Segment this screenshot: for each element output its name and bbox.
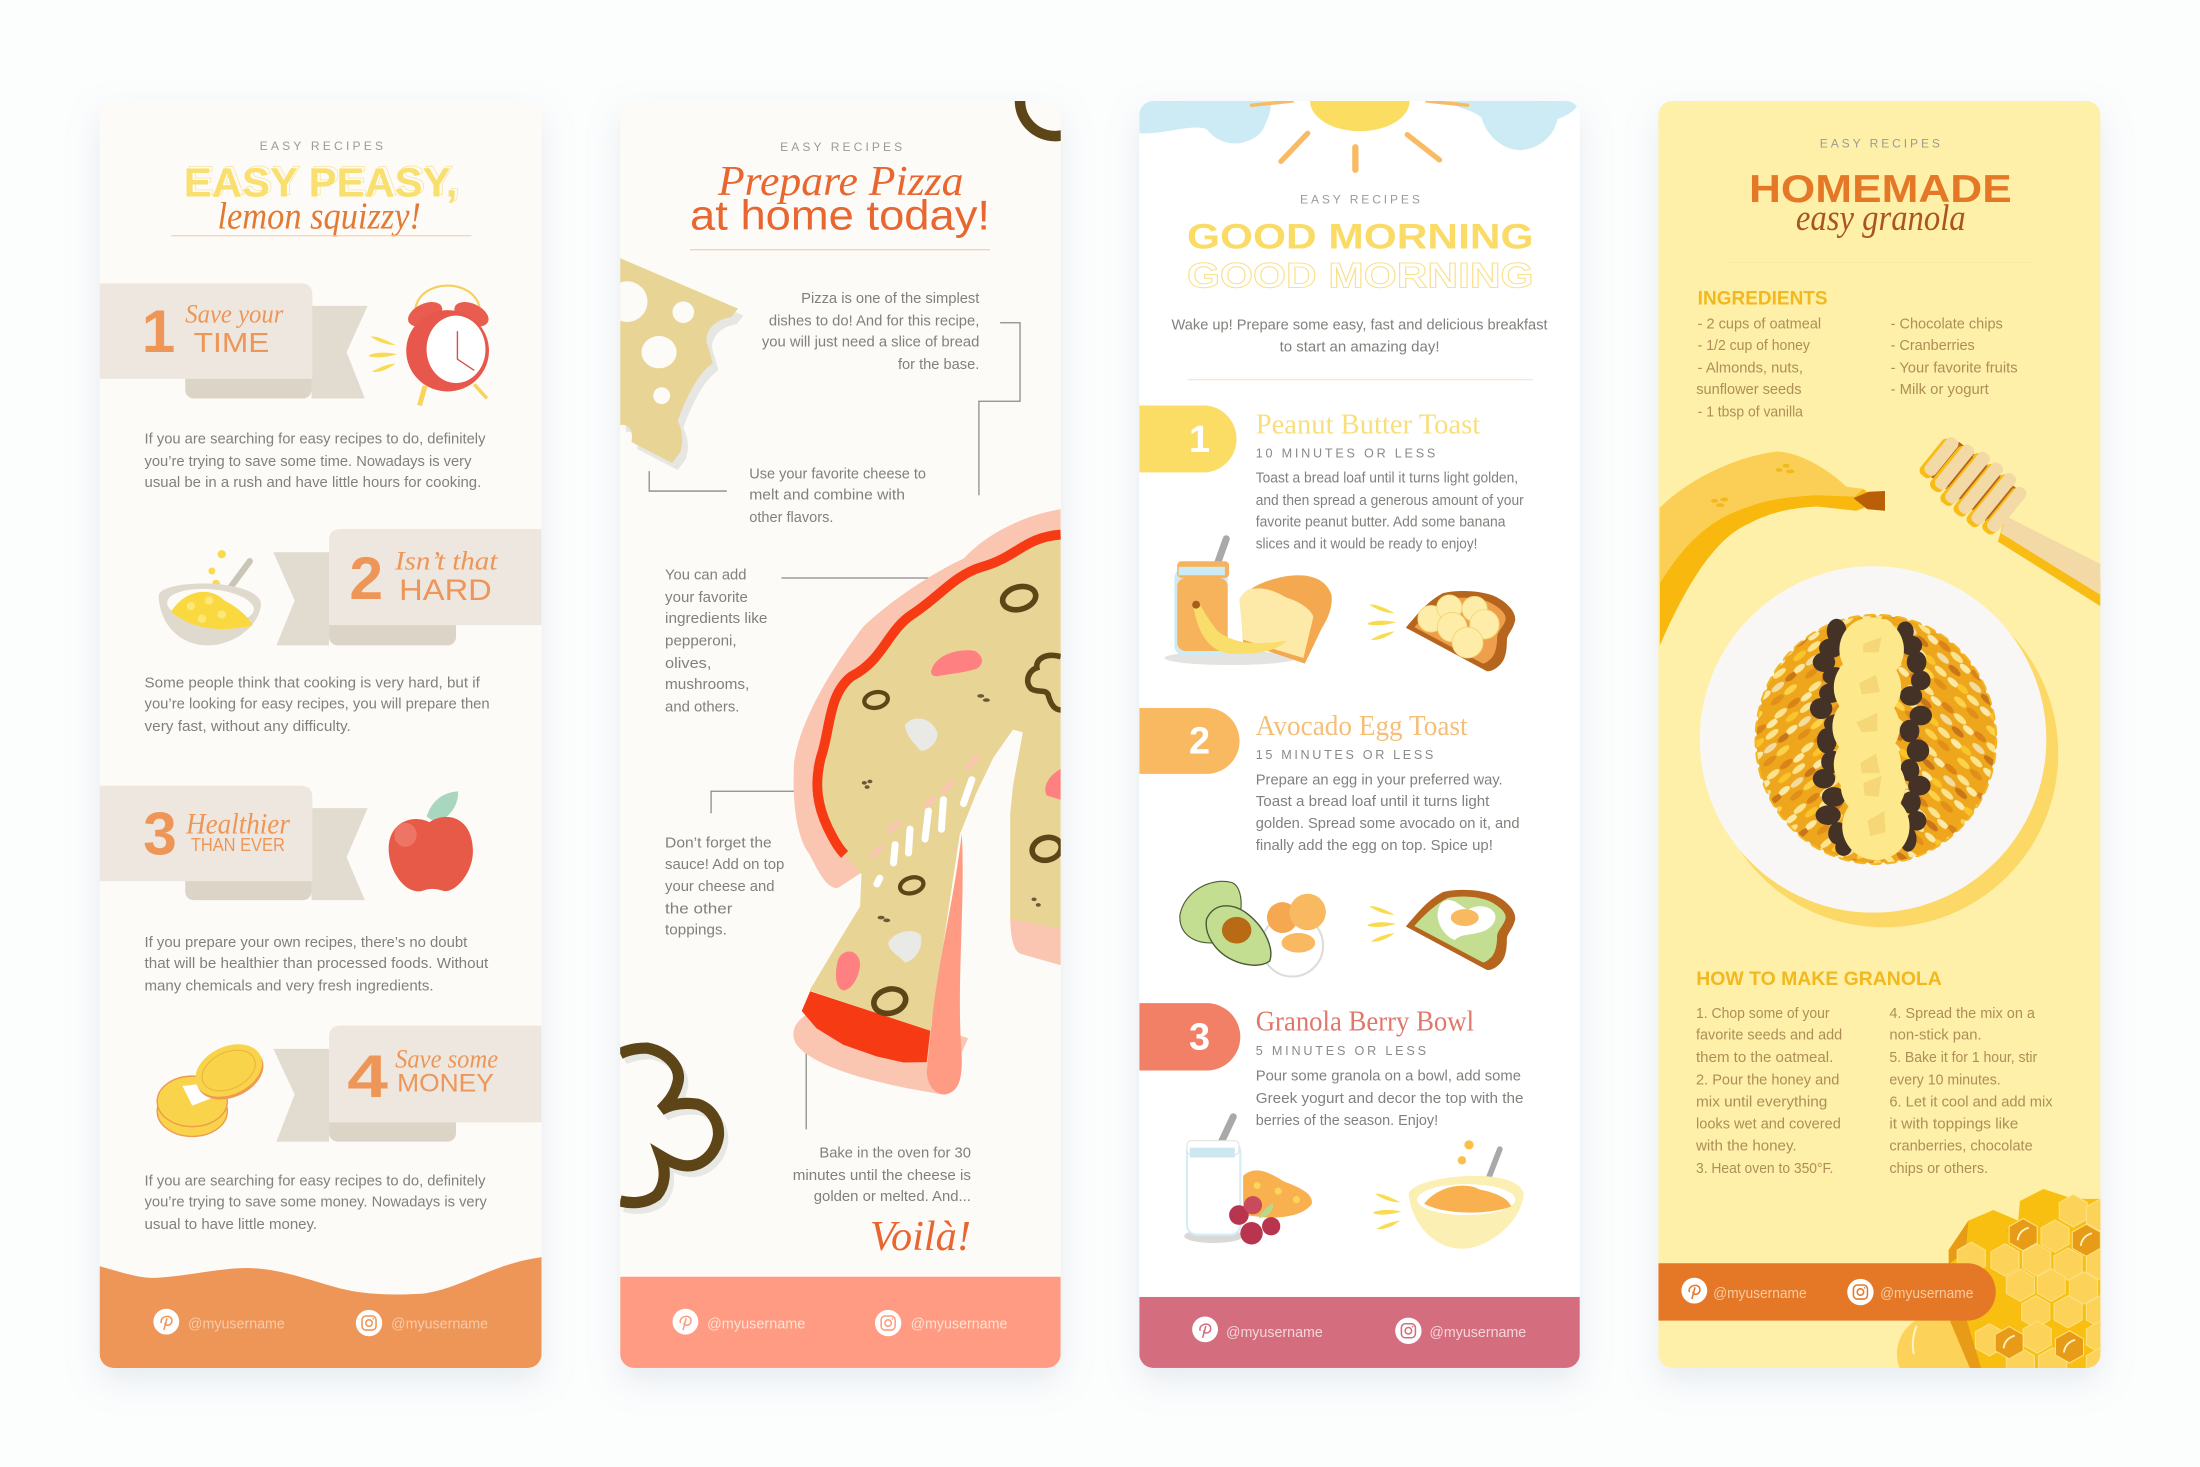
title: good morning: GOOD MORNING [1187, 257, 1534, 296]
step 1 text: peanut butter toast: Peanut Butter Toast [1256, 410, 1480, 441]
step 1 text: peanut butter toast: slices and it would be ready to enjoy! [1256, 537, 1477, 553]
text: save time [145, 431, 486, 491]
illustration: yogurt jar, granola, berries [1184, 1117, 1312, 1244]
step 3 tab [1139, 1003, 1240, 1071]
banner 2: isn't that hard: HARD [399, 574, 492, 607]
banner 1: save your time: TIME [194, 327, 269, 358]
step 1 tab [1139, 405, 1237, 472]
title: easy peasy: EASY PEASY, [184, 159, 457, 205]
footer: social handles [620, 1277, 1061, 1368]
callout: toppings: ingredients like [665, 611, 768, 627]
callout: sauce: Don’t forget the [665, 835, 772, 851]
steps column right: 5. Bake it for 1 hour, stir [1889, 1050, 2037, 1066]
step 1 text: peanut butter toast: Toast a bread loaf until it turns light golden, [1256, 471, 1518, 487]
ingredients list left [1696, 316, 1821, 421]
steps column right: it with toppings like [1889, 1117, 2018, 1133]
footer wave: social handles [100, 1257, 542, 1368]
step 2 text: avocado egg toast: Avocado Egg Toast [1256, 711, 1468, 742]
footer: social handles [1139, 1297, 1580, 1368]
step 2 tab [1139, 708, 1240, 774]
step 2 text: avocado egg toast: 15 MINUTES OR LESS [1256, 748, 1433, 762]
panel: pizza card [620, 101, 1061, 1368]
callout: toppings: olives, [665, 656, 711, 672]
callout: sauce: your cheese and [665, 879, 775, 895]
callout: bake [793, 1145, 971, 1205]
ingredients list left: - 2 cups of oatmeal [1698, 316, 1821, 332]
step 3 text: granola berry bowl: Pour some granola on a bowl, add some [1256, 1068, 1521, 1084]
banner 1: save your time: Save your [185, 299, 284, 329]
illustration: sun and clouds [1139, 101, 1580, 170]
ingredients list left: - 1/2 cup of honey [1698, 338, 1811, 354]
banner 1: save your time [100, 283, 368, 398]
steps column right [1889, 1006, 2053, 1177]
illustration: swiss cheese [607, 258, 744, 470]
step 2 text: avocado egg toast: finally add the egg on top. Spice up! [1256, 838, 1493, 854]
callout: sauce: the other [665, 901, 733, 917]
ingredients list right: - Chocolate chips [1891, 316, 2003, 332]
steps column right: every 10 minutes. [1889, 1073, 2001, 1089]
text: healthier [145, 935, 488, 995]
callout: cheese: Use your favorite cheese to [749, 466, 926, 482]
step 3 text: granola berry bowl: Granola Berry Bowl [1256, 1007, 1474, 1038]
icon: alarm clock [369, 286, 492, 405]
title: good morning [1187, 217, 1534, 296]
banner 3: healthier than ever: 3 [143, 799, 177, 867]
banner 4: save some money: MONEY [397, 1070, 494, 1098]
intro text: Wake up! Prepare some easy, fast and delicious breakfast [1172, 318, 1548, 334]
callout: toppings: pepperoni, [665, 633, 737, 649]
illustration: peanut butter jar, banana and bread [1165, 539, 1332, 665]
steps column left: 2. Pour the honey and [1696, 1073, 1839, 1089]
callout: bread base: for the base. [898, 357, 979, 373]
callout: toppings: your favorite [665, 590, 748, 606]
callout: bread base: Pizza is one of the simplest [801, 291, 979, 307]
banner 4: save some money: Save some [395, 1044, 498, 1074]
banner 2: isn't that hard: Isn’t that [394, 546, 498, 576]
step 2 tab: 2 [1189, 720, 1210, 762]
ingredients list right: - Milk or yogurt [1891, 382, 1989, 398]
steps column right: chips or others. [1889, 1161, 1988, 1177]
steps column right: 6. Let it cool and add mix [1889, 1095, 2053, 1111]
step 2 text: avocado egg toast: Prepare an egg in your preferred way. [1256, 772, 1503, 788]
footer: social handles: @myusername [1429, 1325, 1526, 1341]
text: save money: usual to have little money. [145, 1217, 317, 1233]
steps column left [1695, 1006, 1842, 1177]
ingredients list right [1891, 316, 2018, 398]
ingredients list right: - Cranberries [1891, 338, 1975, 354]
eyebrow: easy recipes: EASY RECIPES [1300, 192, 1420, 206]
icon: red apple [389, 791, 473, 891]
ingredients list right: - Your favorite fruits [1891, 361, 2018, 377]
callout: bake: minutes until the cheese is [793, 1168, 971, 1184]
panel: easy peasy card [100, 139, 542, 1368]
title: easy peasy: EASY PEASY, [187, 157, 460, 203]
footer: social handles: @myusername [707, 1317, 805, 1333]
callout: bread base: dishes to do! And for this recipe, [769, 314, 979, 330]
callout: sauce [665, 835, 784, 938]
footer: social handles: @myusername [1226, 1325, 1323, 1341]
text: save time: usual be in a rush and have little hours for cooking. [145, 475, 481, 491]
callout: cheese [749, 466, 926, 526]
callout: toppings: and others. [665, 699, 739, 715]
illustration: avocado and eggs [1180, 881, 1326, 977]
callout: toppings: mushrooms, [665, 677, 749, 693]
text: not hard: very fast, without any difficulty. [145, 719, 351, 735]
steps column left: them to the oatmeal. [1696, 1050, 1833, 1066]
ingredients list left: - 1 tbsp of vanilla [1698, 405, 1803, 421]
banner 3: healthier than ever: Healthier [185, 808, 290, 840]
illustration: granola plate [1700, 566, 2058, 927]
step 3 text: granola berry bowl: 5 MINUTES OR LESS [1256, 1044, 1426, 1058]
step 3 text: granola berry bowl: Greek yogurt and decor the top with the [1256, 1091, 1523, 1107]
ingredients list left: - Almonds, nuts, [1698, 361, 1803, 377]
panel: good morning card [1139, 101, 1580, 1368]
text: healthier: that will be healthier than processed foods. Without [145, 956, 488, 972]
step 3 text: granola berry bowl [1256, 1007, 1523, 1129]
banner 4: save some money [273, 1026, 542, 1142]
banner 4: save some money: 4 [347, 1042, 389, 1110]
callout: sauce: toppings. [665, 922, 727, 938]
text: not hard [145, 675, 490, 735]
steps column right: cranberries, chocolate [1889, 1138, 2033, 1154]
eyebrow: easy recipes: EASY RECIPES [1820, 136, 1940, 150]
title: prepare pizza [690, 158, 990, 238]
text: not hard: Some people think that cooking is very hard, but if [145, 675, 480, 691]
icon: mushroom outline top right [1014, 101, 1061, 142]
banner 1: save your time: 1 [142, 297, 175, 365]
banner 2: isn't that hard: 2 [349, 544, 383, 612]
step 1 text: peanut butter toast [1256, 410, 1524, 553]
callout: bake: golden or melted. And... [814, 1189, 971, 1205]
title script: easy granola: easy granola [1796, 198, 1966, 238]
illustration: honey dipper [1912, 427, 2100, 606]
heading: how to make granola: HOW TO MAKE GRANOLA [1696, 969, 1942, 990]
footer wave: social handles: @myusername [188, 1317, 285, 1333]
step 1 text: peanut butter toast: and then spread a generous amount of your [1256, 493, 1524, 509]
title: prepare pizza: at home today! [690, 191, 990, 238]
steps column left: 1. Chop some of your [1696, 1006, 1830, 1022]
title script: lemon squizzy: lemon squizzy! [217, 196, 421, 238]
step 1 tab: 1 [1189, 419, 1210, 461]
eyebrow: easy recipes: EASY RECIPES [260, 139, 383, 153]
callout: bread base [762, 291, 979, 373]
title: good morning: GOOD MORNING [1187, 217, 1534, 256]
title: prepare pizza: Prepare Pizza [717, 158, 963, 205]
panel: homemade granola card [1658, 136, 2114, 1393]
illustration: banana [1660, 452, 1885, 645]
icon: cereal bowl [159, 550, 261, 645]
text: save money: If you are searching for easy recipes to do, definitely [145, 1174, 486, 1190]
steps column left: with the honey. [1695, 1138, 1797, 1154]
icon: mushroom outline bottom left [620, 1048, 723, 1208]
steps column right: 4. Spread the mix on a [1889, 1006, 2035, 1022]
text: not hard: you’re looking for easy recipes, you will prepare then [145, 697, 490, 713]
illustration: pizza with pulled slice [793, 509, 1064, 1095]
text: save time: If you are searching for easy recipes to do, definitely [145, 431, 486, 447]
step 3 tab: 3 [1189, 1016, 1210, 1058]
ingredients list left: sunflower seeds [1696, 382, 1802, 398]
step 1 text: peanut butter toast: favorite peanut butter. Add some banana [1256, 515, 1506, 531]
text: save money: you’re trying to save some money. Nowadays is very [145, 1195, 488, 1211]
callout: bake: Bake in the oven for 30 [819, 1145, 971, 1161]
ingredients heading: INGREDIENTS [1698, 288, 1828, 309]
illustration: banana toast [1368, 591, 1515, 671]
illustration: honeycomb [1897, 1189, 2114, 1393]
callout: cheese: melt and combine with [749, 487, 905, 503]
icon: gold coins [156, 1044, 264, 1138]
banner 3: healthier than ever [100, 786, 368, 900]
step 2 text: avocado egg toast [1256, 711, 1520, 854]
heading: voila: Voilà! [870, 1213, 971, 1260]
callout: sauce: sauce! Add on top [665, 857, 784, 873]
callout: toppings: You can add [665, 567, 746, 583]
footer: social handles: @myusername [911, 1317, 1007, 1333]
banner 2: isn't that hard [273, 529, 542, 645]
callout: toppings [665, 567, 768, 715]
steps column left: 3. Heat oven to 350°F. [1696, 1161, 1833, 1177]
steps column right: non-stick pan. [1889, 1028, 1982, 1044]
intro text [1172, 318, 1548, 355]
footer: social handles: @myusername [1713, 1286, 1807, 1302]
text: healthier: many chemicals and very fresh ingredients. [145, 979, 434, 995]
illustration: avocado egg toast [1368, 890, 1515, 970]
text: save time: you’re trying to save some time. Nowadays is very [145, 454, 472, 470]
intro text: to start an amazing day! [1280, 339, 1440, 355]
steps column left: favorite seeds and add [1696, 1028, 1842, 1044]
steps column left: mix until everything [1696, 1095, 1827, 1111]
step 3 text: granola berry bowl: berries of the season. Enjoy! [1256, 1113, 1438, 1129]
callout: bread base: you will just need a slice of bread [762, 335, 979, 351]
text: healthier: If you prepare your own recipes, there’s no doubt [145, 935, 467, 951]
steps column left: looks wet and covered [1696, 1117, 1841, 1133]
footer: social handles: @myusername [1880, 1286, 1973, 1302]
footer wave: social handles: @myusername [391, 1317, 488, 1333]
illustration: granola bowl [1374, 1140, 1524, 1249]
step 1 text: peanut butter toast: 10 MINUTES OR LESS [1256, 446, 1435, 460]
footer: social handles [1658, 1263, 1996, 1321]
title: homemade: HOMEMADE [1749, 167, 2012, 211]
step 2 text: avocado egg toast: Toast a bread loaf until it turns light [1256, 794, 1489, 810]
callout: cheese: other flavors. [749, 510, 833, 526]
eyebrow: easy recipes: EASY RECIPES [780, 140, 902, 154]
banner 3: healthier than ever: THAN EVER [191, 834, 285, 855]
step 2 text: avocado egg toast: golden. Spread some avocado on it, and [1256, 816, 1520, 832]
leader lines [649, 323, 1020, 1129]
text: save money [145, 1174, 488, 1233]
